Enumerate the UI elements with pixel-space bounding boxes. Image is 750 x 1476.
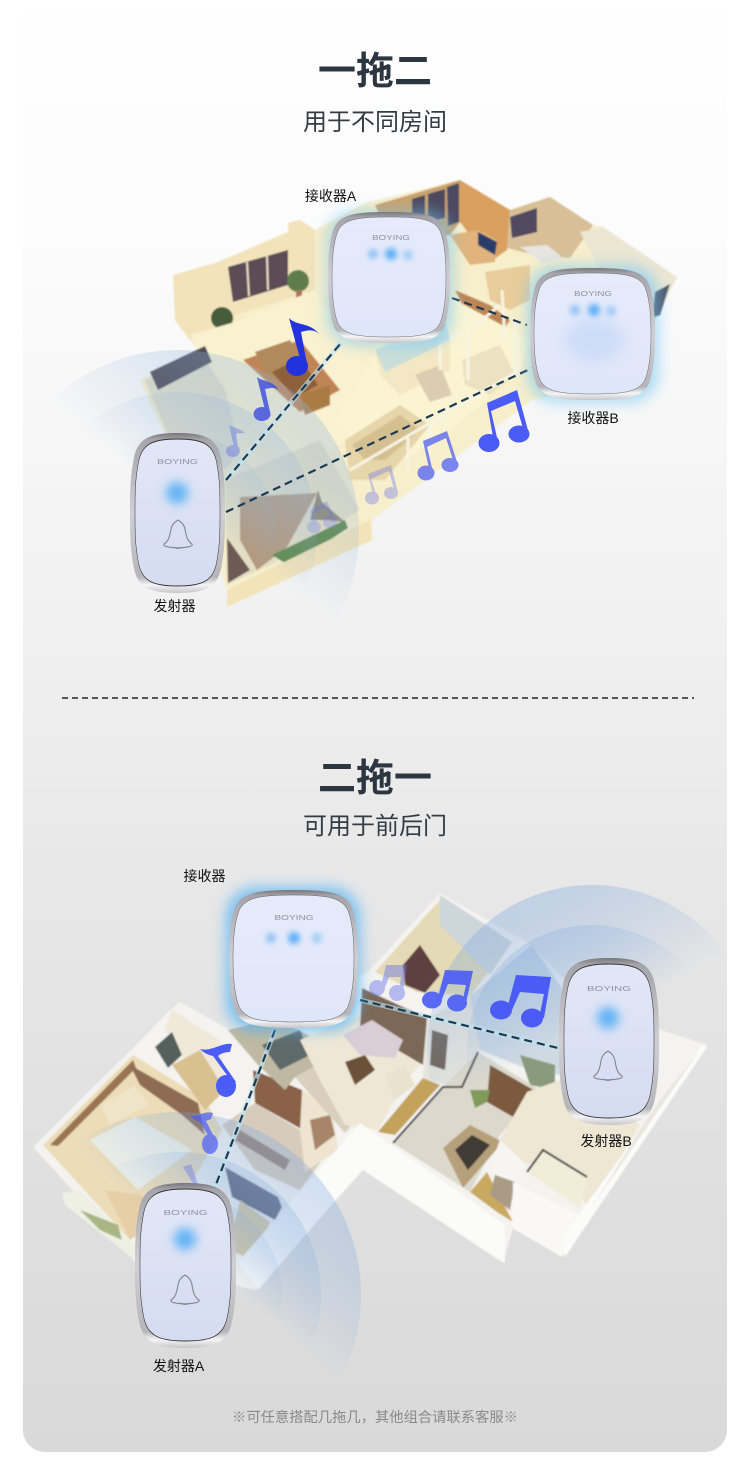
illustration: top floor plan xyxy=(140,180,677,607)
title: two to one: 二拖一 xyxy=(318,758,432,800)
dashed signal lines: top xyxy=(226,298,532,512)
note: faint beamed xyxy=(369,965,407,1001)
note: dark single xyxy=(286,318,319,376)
music notes: bottom xyxy=(183,965,551,1197)
subtitle: front and back doors: 可用于前后门 xyxy=(303,813,447,840)
device: transmitter B xyxy=(559,958,659,1125)
section divider xyxy=(62,697,694,699)
device: bottom receiver: BOYING xyxy=(274,915,314,922)
label: transmitter: 发射器 xyxy=(154,598,196,614)
device: receiver B xyxy=(527,265,659,403)
signal waves: top transmitter xyxy=(0,350,359,714)
note: very faint xyxy=(307,501,337,533)
note: faint single xyxy=(226,425,245,457)
icon: bell xyxy=(594,1051,622,1080)
device: transmitter A xyxy=(135,1183,236,1348)
device: receiver B: BOYING xyxy=(574,291,612,298)
device: top transmitter: BOYING xyxy=(157,459,198,466)
label: transmitter A: 发射器A xyxy=(153,1358,205,1374)
note: medium single xyxy=(190,1112,218,1154)
device: bottom receiver xyxy=(226,887,360,1031)
illustration: bottom floor plan xyxy=(33,893,707,1290)
note: big beamed xyxy=(478,390,530,452)
note: medium beamed xyxy=(422,970,473,1012)
note: medium single xyxy=(254,377,279,421)
device: transmitter A: BOYING xyxy=(164,1210,208,1217)
title: one to two: 一拖二 xyxy=(318,51,432,93)
note: medium beamed xyxy=(418,431,458,480)
dashed signal lines: bottom xyxy=(215,1000,558,1187)
note: big beamed B xyxy=(490,975,551,1028)
device: top transmitter xyxy=(130,433,225,593)
device: receiver A xyxy=(326,210,454,346)
label: receiver B: 接收器B xyxy=(567,410,619,426)
note: faint beamed xyxy=(365,465,398,504)
device: transmitter B: BOYING xyxy=(587,986,631,993)
footer note: ※可任意搭配几拖几，其他组合请联系客服※ xyxy=(232,1408,518,1426)
music notes: top xyxy=(226,318,530,533)
signal waves: transmitter B xyxy=(427,885,750,1215)
icon: bell xyxy=(171,1275,199,1304)
icon: bell xyxy=(164,520,192,548)
signal waves: transmitter A xyxy=(0,1112,361,1476)
label: receiver: 接收器 xyxy=(184,868,226,884)
note: faint single xyxy=(183,1164,202,1197)
note: big single xyxy=(200,1044,236,1097)
label: receiver A: 接收器A xyxy=(305,188,357,204)
label: transmitter B: 发射器B xyxy=(580,1133,632,1149)
subtitle: different rooms: 用于不同房间 xyxy=(303,109,447,136)
device: receiver A: BOYING xyxy=(372,235,410,242)
